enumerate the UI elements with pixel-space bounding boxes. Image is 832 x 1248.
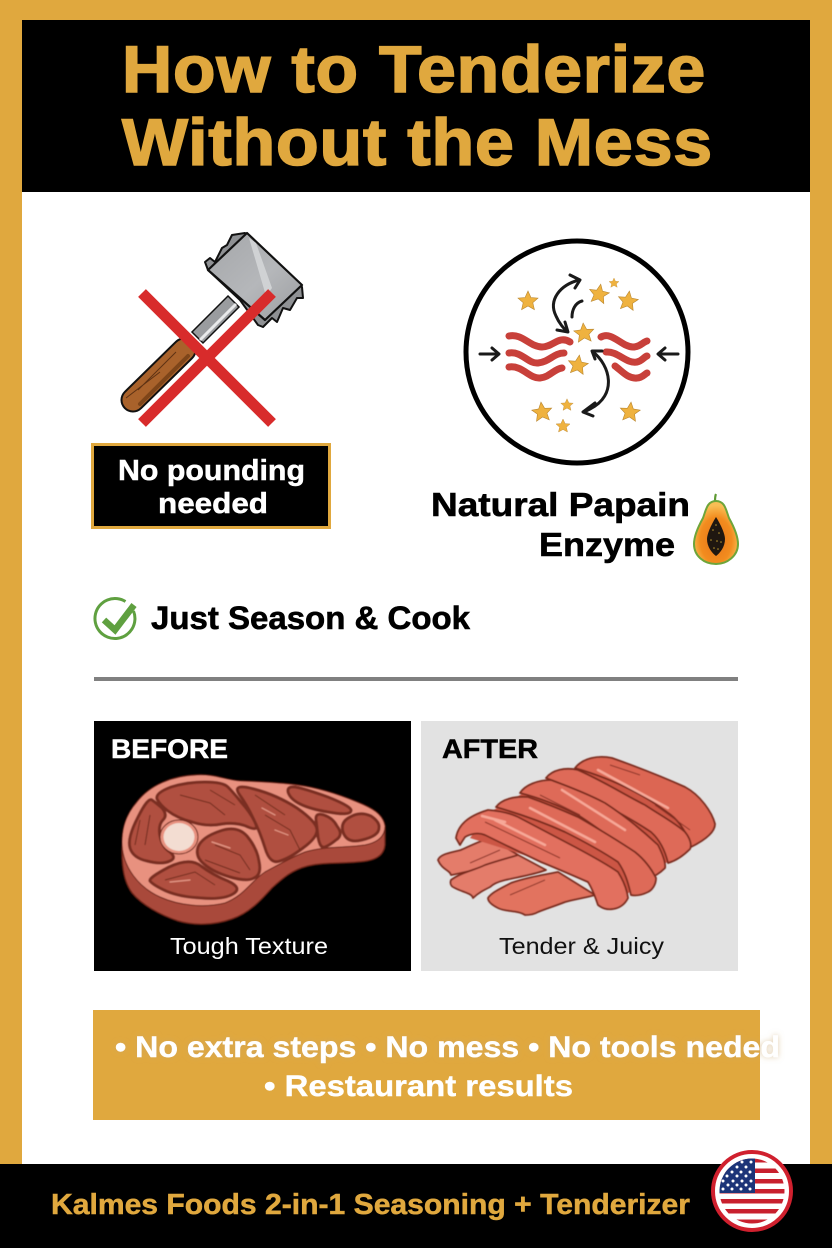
caption: tender and juicy: Tender & Juicy <box>499 933 665 959</box>
right muscle fibres <box>601 336 647 378</box>
icon: usa flag badge <box>713 1152 791 1230</box>
caption: tough texture: Tough Texture <box>170 933 328 959</box>
heading: just season and cook: Just Season & Cook <box>151 600 470 636</box>
footer bar <box>0 1164 832 1248</box>
illustration: tender meat strips <box>438 757 715 915</box>
diagram: enzyme action circle <box>466 241 688 463</box>
heading: before: BEFORE <box>111 734 228 764</box>
label: natural papain enzyme <box>431 486 690 563</box>
title banner: How to Tenderize <box>122 32 706 106</box>
panel: before <box>94 721 411 971</box>
callout: no pounding needed: needed <box>158 488 268 520</box>
callout: no pounding needed: No pounding <box>118 455 305 487</box>
left muscle fibres <box>509 336 570 378</box>
footer bar: Kalmes Foods 2-in-1 Seasoning + Tenderizer <box>51 1189 690 1221</box>
icon: papaya <box>694 494 738 564</box>
curved exchange arrows <box>553 275 608 416</box>
mallet shaft <box>192 296 239 343</box>
enzyme stars <box>518 278 641 432</box>
benefits banner: • No extra steps • No mess • No tools neded <box>115 1031 780 1064</box>
panel: after <box>421 721 738 971</box>
red cross <box>142 293 272 423</box>
white content panel <box>22 190 810 1166</box>
label: natural papain enzyme: Natural Papain <box>431 486 690 523</box>
illustration: tough steak <box>122 775 385 924</box>
heading: after: AFTER <box>442 734 538 764</box>
strip underlayer <box>470 762 700 905</box>
label: natural papain enzyme: Enzyme <box>539 526 675 563</box>
title banner <box>22 20 810 192</box>
callout: no pounding needed <box>92 444 330 528</box>
mallet head <box>205 233 303 327</box>
icon: green check <box>95 598 135 638</box>
benefits banner: • Restaurant results <box>264 1070 573 1103</box>
icon: crossed-out meat mallet <box>126 233 303 423</box>
mallet wooden handle <box>126 350 188 404</box>
benefits banner <box>93 1010 780 1120</box>
title banner: Without the Mess <box>122 105 713 179</box>
inward arrows <box>480 348 678 360</box>
